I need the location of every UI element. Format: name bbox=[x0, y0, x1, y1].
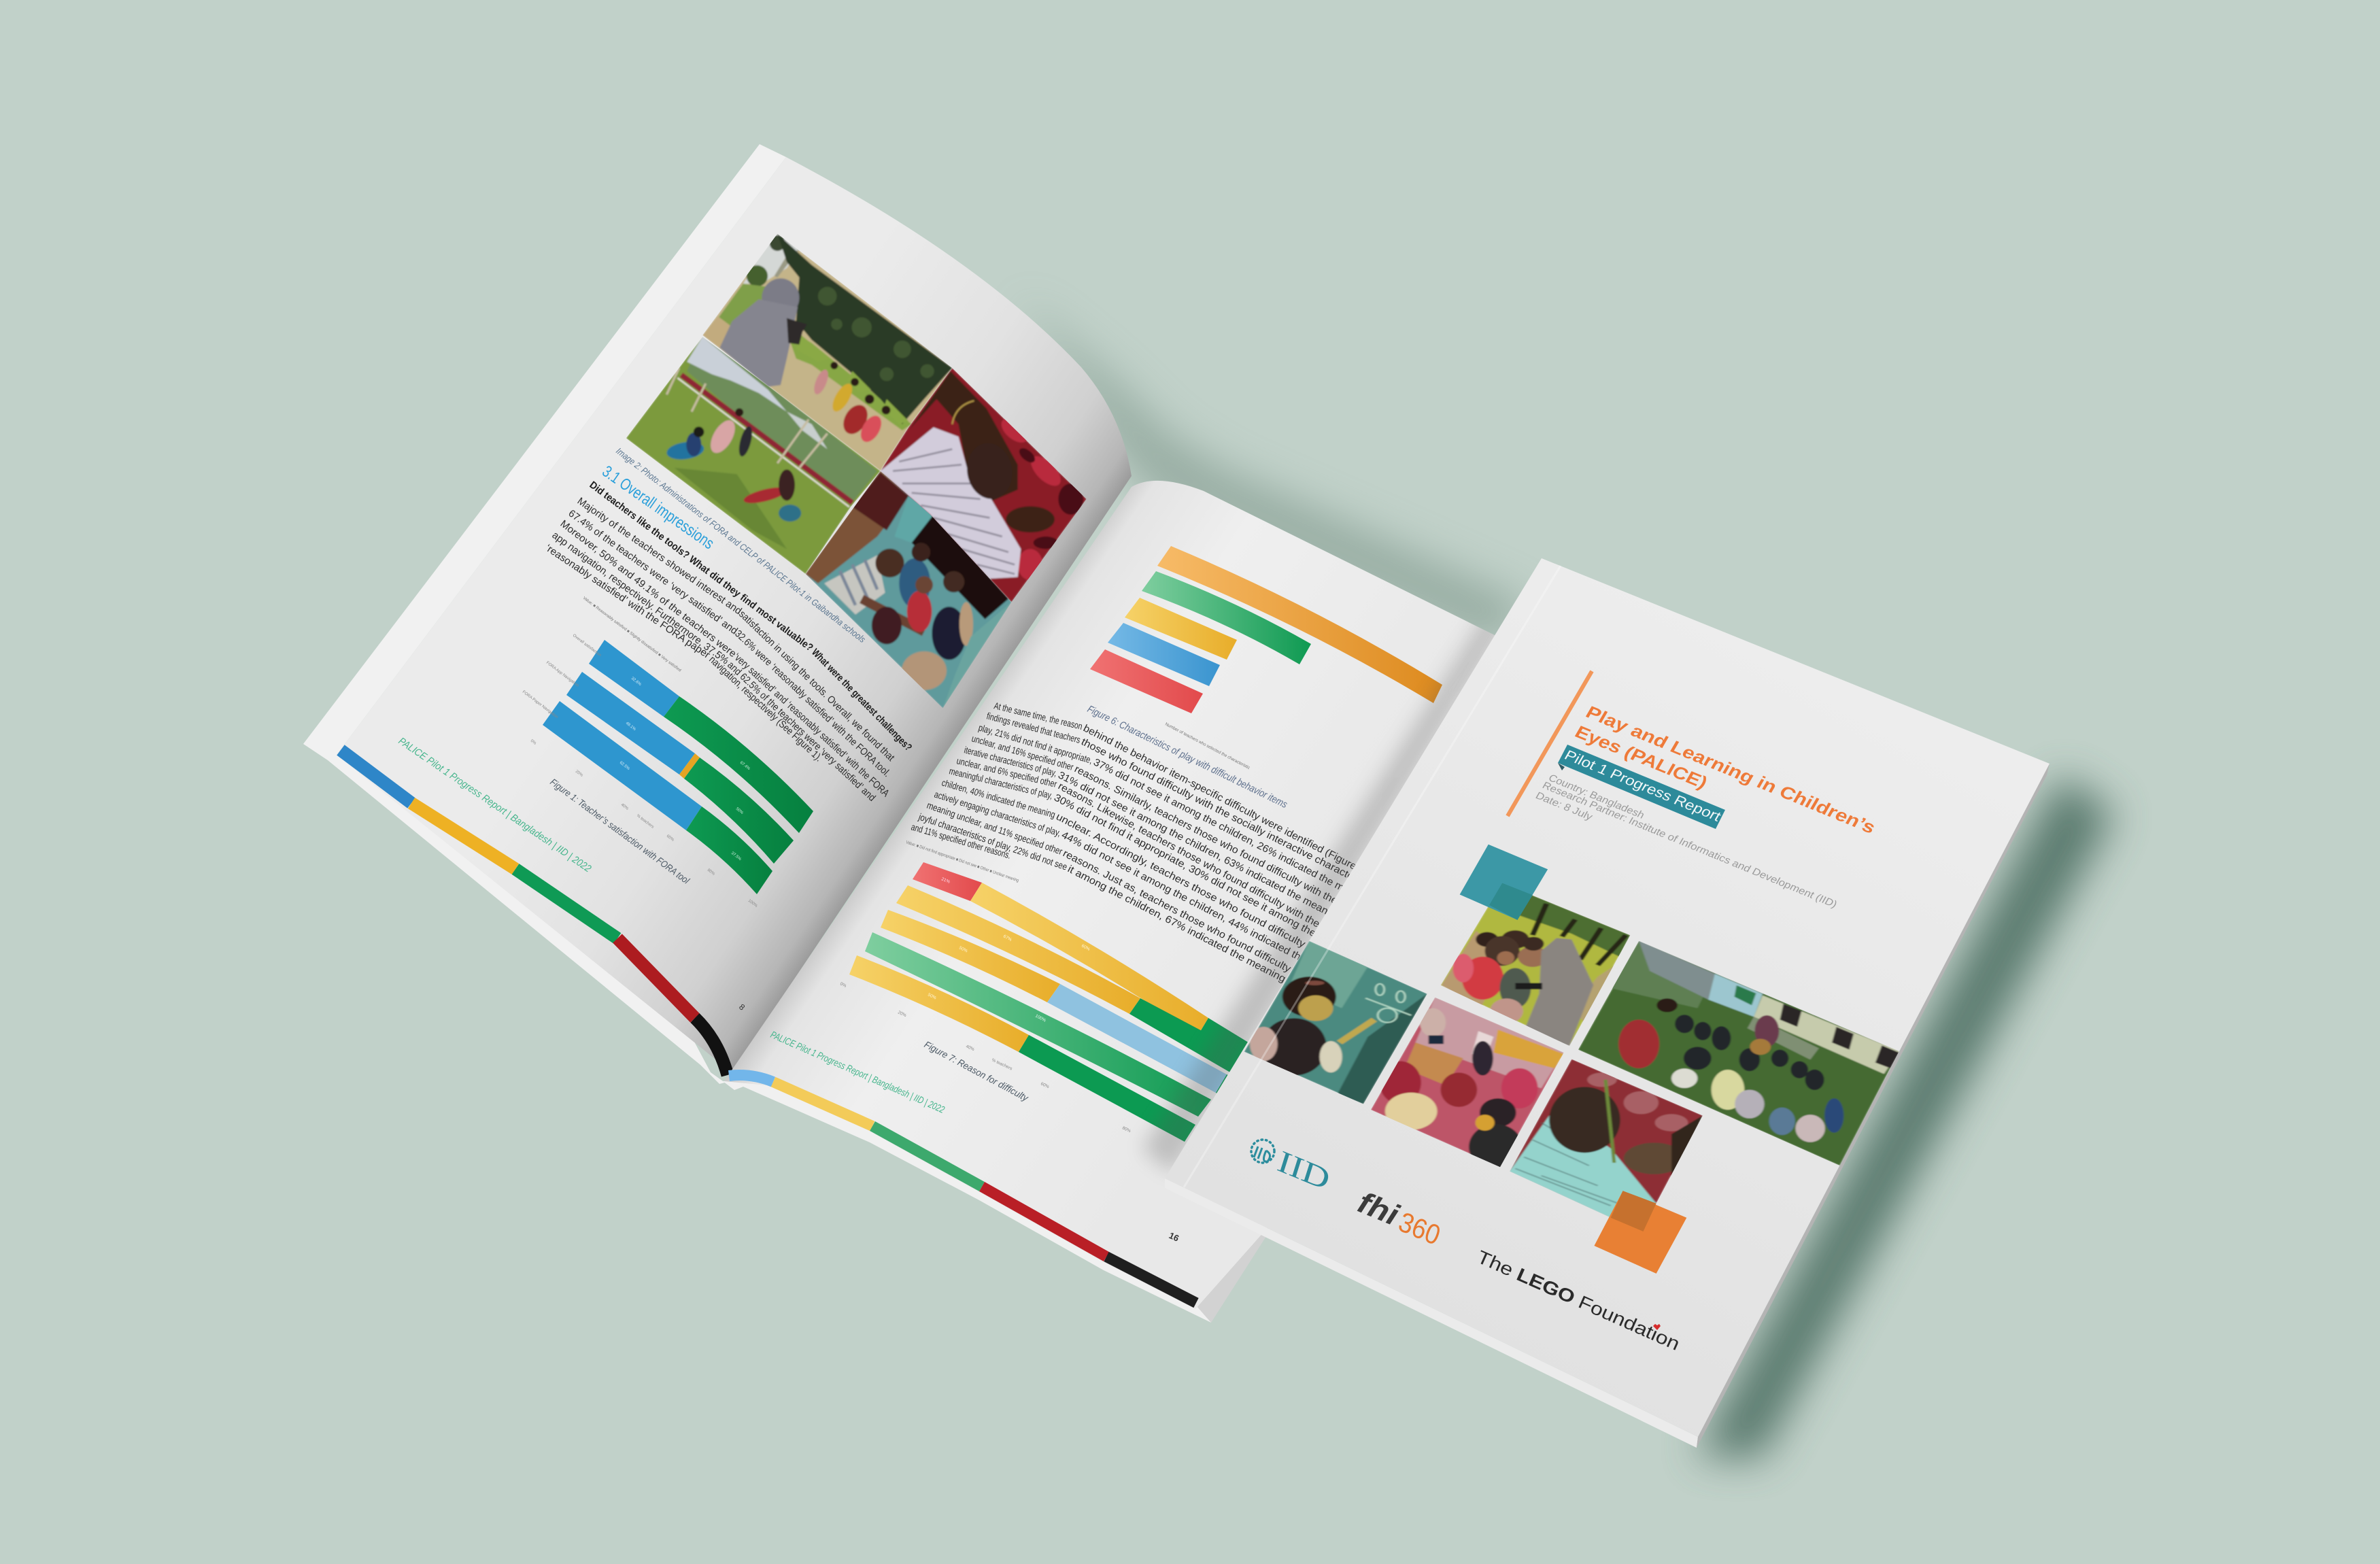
photo collage: administrations of FORA and CELP bbox=[626, 234, 1087, 708]
cover photo grid bbox=[1244, 845, 1899, 1274]
axis labels: % teachers bbox=[991, 1057, 1013, 1072]
bar: socially interactive: 21% bbox=[940, 877, 951, 885]
bar: actively engaging: 50% bbox=[958, 946, 968, 954]
report details: Date: 8 July bbox=[1533, 790, 1595, 823]
body text: right page: reasons. Just as, teachers those who found difficulty bbox=[1061, 847, 1293, 975]
photo: hand writing on paper bbox=[881, 368, 1087, 602]
body text: right page: 37% did not see it among the children, 26% indicated the meaning bbox=[1091, 756, 1374, 908]
cover lower edge bbox=[1165, 1178, 1698, 1448]
axis title: Number of teachers who selected the characteristic bbox=[1164, 722, 1251, 770]
bar: overall satisfaction: 67.4% bbox=[739, 761, 751, 771]
body text: right page: 44% did not see it among the children, 44% indicated the bbox=[1059, 829, 1308, 966]
photo: girl at chalkboard bbox=[1244, 941, 1427, 1104]
right page of open report bbox=[723, 481, 1564, 1323]
page block edge bbox=[303, 144, 786, 1084]
bar: socially interactive red bbox=[1090, 649, 1203, 713]
logo: fhi360: 360 bbox=[1395, 1206, 1444, 1251]
bar: joyful: 50% bbox=[927, 993, 937, 1001]
caption: image 2: Image 2: Photo: Administrations of FORA and CELP of PALICE Pilot-1 in Gaibandha schools bbox=[614, 446, 868, 645]
page sheet bbox=[337, 157, 1132, 1072]
logo: fhi360: fhi bbox=[1354, 1185, 1404, 1233]
page sheet bbox=[724, 481, 1564, 1309]
bar: actively engaging yellow bbox=[1125, 598, 1237, 660]
body text: right page: children, 40% indicated the meaning bbox=[940, 777, 1057, 820]
shadow: book spread top bbox=[1020, 299, 1530, 646]
body text: right page: 30% did not find it appropriate, 30% did not see it among the bbox=[1052, 792, 1318, 939]
body text: left page: ‘very satisfied’ and ‘reasonably satisfied’ with the FORA bbox=[731, 651, 891, 799]
caption: figure 1: Figure 1: Teacher’s satisfaction with FORA tool bbox=[548, 777, 692, 886]
subheading question: What were the greatest challenges? bbox=[809, 647, 914, 753]
axis labels: 40% bbox=[620, 803, 630, 811]
body text: right page: meaningful characteristics of play, bbox=[948, 765, 1054, 801]
axis labels: 0% bbox=[839, 981, 847, 989]
bar: joyful bbox=[849, 955, 1195, 1142]
axis labels bbox=[839, 981, 1132, 1134]
left page of open report bbox=[303, 144, 1132, 1084]
axis labels: 60% bbox=[666, 834, 675, 843]
legend: Value: ■ Did not find appropriate ■ Did not see ■ Other ■ Unclear meaning bbox=[905, 840, 1019, 883]
subheading question bbox=[588, 479, 914, 753]
photo: hand writing on paper bbox=[1510, 1059, 1703, 1218]
body text: right page: behind the behavior item-specific difficulty were identified (Figure 6). The bbox=[1081, 722, 1391, 889]
body text: right page: those who found difficulty with the socially interactive characteristics bbox=[1079, 736, 1381, 896]
title: Play and Learning in Children’s bbox=[1582, 702, 1880, 837]
body text: left page: 67.4% of the teachers were ‘very satisfied’ and bbox=[566, 507, 740, 636]
axis labels: 20% bbox=[897, 1010, 907, 1018]
bar: iterative: 67% bbox=[1002, 934, 1013, 942]
body text: right page: unclear. Accordingly, teachers those who found difficulty with bbox=[1054, 811, 1328, 961]
axis labels: % teachers bbox=[636, 814, 654, 830]
body text: right page: play, 21% did not find it appropriate, bbox=[977, 722, 1094, 766]
shadow: cover bbox=[1697, 775, 2115, 1459]
axis labels: 20% bbox=[575, 770, 584, 778]
page number 16: 16 bbox=[1168, 1230, 1180, 1244]
body text: left page: 32.6% were ‘reasonably satisfied’ with the FORA tool. bbox=[732, 628, 893, 779]
report cover bbox=[1165, 558, 2050, 1448]
banner: pilot 1 progress report: Pilot 1 Progress Report bbox=[1561, 747, 1724, 824]
body text: right page: it among the children, 67% indicated the meaning unclear, bbox=[1066, 863, 1325, 1004]
axis labels: 100% bbox=[747, 899, 758, 908]
wordmark: IID bbox=[1274, 1144, 1334, 1197]
lower white page edge bbox=[723, 1081, 1211, 1323]
bar: overall satisfaction bbox=[589, 640, 813, 833]
bar: FORA paper navigation: 37.5% bbox=[730, 851, 742, 862]
body text: right page: iterative characteristics of play, bbox=[963, 744, 1058, 779]
axis labels: 80% bbox=[1121, 1125, 1132, 1134]
body text: left page: Majority of the teachers showed interest and bbox=[575, 495, 744, 617]
axis labels: FORA Paper Navigation bbox=[522, 690, 559, 719]
colour stripe: right page bbox=[729, 1075, 1196, 1303]
bar: socially interactive bbox=[913, 862, 1278, 1081]
bar: joyful orange bbox=[1157, 546, 1442, 703]
bar: FORA app navigation: 49.1% bbox=[625, 721, 636, 732]
bar: FORA paper navigation bbox=[543, 701, 772, 894]
axis labels: 0% bbox=[530, 739, 537, 746]
icon: IID swirl bbox=[1251, 1140, 1274, 1163]
bar: socially interactive: 60% bbox=[1081, 944, 1091, 952]
body text: right page: unclear, and 6% specified other bbox=[955, 755, 1058, 789]
axis labels bbox=[522, 634, 758, 908]
photo: teacher and hijab with children bbox=[1441, 883, 1630, 1046]
body text: right page: and 11% specified other reasons. bbox=[910, 821, 1012, 861]
body text: right page: joyful characteristics of play, 22% did not see bbox=[917, 811, 1069, 872]
page number 8: 8 bbox=[737, 1002, 747, 1013]
body text: left page: satisfaction in using the tools. Overall, we found that bbox=[736, 609, 897, 764]
body text: right page: actively engaging characteristics of play, bbox=[933, 789, 1062, 838]
axis labels: FORA App Navigation bbox=[545, 661, 579, 688]
logo: IID bbox=[1251, 1140, 1334, 1197]
photo: children in circle on grass bbox=[1578, 941, 1899, 1166]
title: Eyes (PALICE) bbox=[1571, 721, 1712, 792]
body text: left page: Moreover, 50% and 49.1% of the teachers were bbox=[558, 518, 738, 660]
caption: figure 7: Figure 7: Reason for difficulty bbox=[923, 1039, 1031, 1104]
cover face bbox=[1165, 558, 2050, 1437]
spine crease on cover bbox=[1184, 566, 1561, 1187]
teal square accent bbox=[1460, 845, 1548, 920]
report details: Research Partner: Institute of Informatics and Development (IID) bbox=[1540, 780, 1839, 911]
report details: Country: Bangladesh bbox=[1546, 772, 1646, 821]
bar: iterative bbox=[896, 885, 1265, 1085]
photo: classroom training bbox=[1371, 998, 1564, 1170]
body text: right page: meaning unclear, and 11% specified other bbox=[925, 800, 1064, 857]
logo: the LEGO foundation: The LEGO Foundation bbox=[1474, 1246, 1683, 1355]
photo: children on school field bbox=[626, 337, 881, 574]
bar: FORA app navigation bbox=[566, 672, 794, 864]
page block side bbox=[1195, 1217, 1278, 1323]
body text: right page bbox=[910, 700, 1391, 1004]
body text: right page: unclear, and 16% specified other bbox=[970, 733, 1075, 772]
body text: left page bbox=[543, 495, 897, 804]
bar: overall satisfaction: 32.6% bbox=[630, 677, 642, 687]
colour stripe: left page bbox=[341, 750, 728, 1075]
heading: 3.1 overall impressions: 3.1 Overall impressions bbox=[599, 462, 717, 553]
cover right edge bbox=[1697, 764, 2050, 1448]
bar: FORA paper navigation: 62.5% bbox=[619, 761, 630, 771]
photo: group with teacher and phone bbox=[806, 471, 1012, 708]
body text: left page: app navigation, respectively. Furthermore, 37.5% bbox=[550, 530, 731, 666]
legend: Value: ■ Reasonably satisfied ■ Slightly dissatisfied ■ Very satisfied bbox=[582, 596, 682, 673]
body text: left page: and 62.5% of the teachers were ‘very satisfied’ and bbox=[725, 660, 878, 804]
bar: actively engaging bbox=[881, 910, 1258, 1108]
body text: right page: findings revealed that teachers bbox=[985, 710, 1082, 745]
bar: FORA app navigation: 50% bbox=[735, 807, 744, 815]
icon: heart bbox=[1653, 1324, 1661, 1330]
bar: meaningful green bbox=[1142, 571, 1311, 664]
subheading question: Did teachers like the tools? What did they find most valuable? bbox=[588, 479, 815, 653]
caption: figure 6: Figure 6: Characteristics of play with difficult behavior items bbox=[1085, 703, 1289, 811]
logo: fhi360 bbox=[1354, 1185, 1444, 1251]
shadow: cover onto right page bbox=[1142, 564, 1542, 1173]
axis labels: 40% bbox=[965, 1044, 975, 1052]
axis labels: 60% bbox=[1040, 1081, 1050, 1089]
footer: right page: PALICE Pilot 1 Progress Report | Bangladesh | IID | 2022 bbox=[768, 1030, 946, 1116]
body text: right page: reasons. Likewise, teachers those who found difficulty with the bbox=[1056, 781, 1322, 930]
body text: right page: 31% did not see it among the children, 63% indicated the meaning bbox=[1056, 769, 1343, 923]
body text: right page: reasons. Similarly, teachers those who found difficulty with the bbox=[1072, 763, 1340, 907]
chart: teacher's satisfaction with FORA tool bbox=[522, 596, 813, 908]
orange square accent bbox=[1594, 1191, 1686, 1274]
bar: meaningful: 100% bbox=[1034, 1014, 1047, 1023]
body text: left page: ‘reasonably satisfied’ with the FORA paper bbox=[543, 542, 712, 661]
chart: figure 7 reasons for difficulty bbox=[839, 840, 1278, 1142]
axis labels: Overall satisfaction bbox=[572, 634, 602, 658]
chart: figure 6 characteristics bars bbox=[1090, 546, 1442, 770]
bar: iterative blue bbox=[1108, 623, 1220, 686]
body text: left page: navigation, respectively (See Figure 1). bbox=[707, 653, 824, 764]
axis labels: 80% bbox=[707, 868, 716, 877]
bar: meaningful bbox=[865, 932, 1211, 1117]
accent bar bbox=[1508, 671, 1592, 816]
photo: trees and hijab bbox=[702, 234, 952, 471]
footer: left page: PALICE Pilot 1 Progress Report | Bangladesh | IID | 2022 bbox=[396, 735, 594, 875]
body text: right page: At the same time, the reason bbox=[993, 700, 1083, 732]
